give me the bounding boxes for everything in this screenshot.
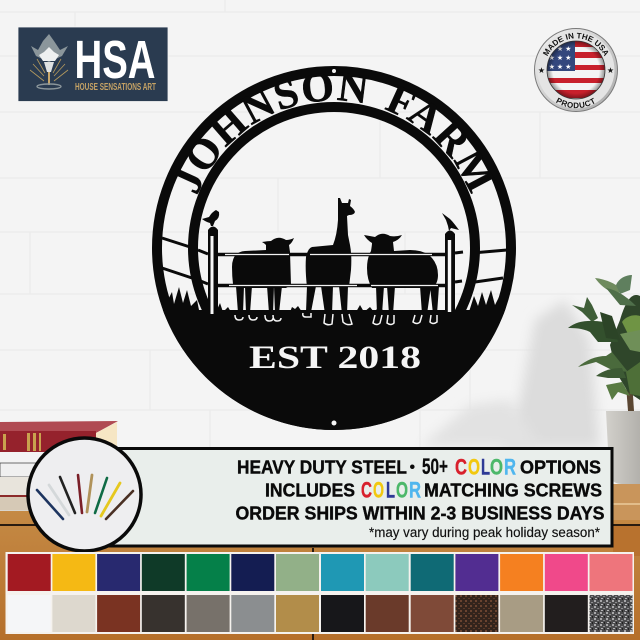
swatch row two [8, 595, 632, 632]
wood tabletop [0, 484, 640, 640]
llama legs [306, 286, 348, 314]
line two: MATCHING SCREWS [424, 480, 602, 500]
line two: O [396, 478, 408, 502]
ground and lower scene [162, 236, 506, 430]
llama [306, 198, 355, 314]
bird right [442, 213, 459, 231]
badge top text: MADE IN THE USA [542, 32, 608, 56]
badge bottom text: PRODUCT [556, 98, 594, 108]
line one: R [504, 454, 516, 480]
line one: O [490, 454, 503, 480]
badge: Made in the USA [534, 28, 618, 112]
note: *may vary during peak holiday season* [369, 525, 601, 540]
line one: O [468, 454, 480, 480]
line two: L [386, 478, 395, 502]
line two: INCLUDES [265, 480, 355, 500]
metal sign: Johnson Farm [152, 66, 516, 430]
established year: EST 2018 [249, 340, 421, 376]
inner ring [193, 107, 475, 389]
line one: HEAVY DUTY STEEL [237, 456, 407, 478]
info panel [105, 448, 612, 546]
line one: • [410, 459, 416, 476]
line two [265, 478, 602, 502]
right fence post [445, 230, 455, 312]
badge: Made in the USA: ★ [607, 66, 614, 75]
line two: O [373, 478, 384, 502]
bird left [202, 210, 219, 226]
sheep right legs [376, 286, 439, 314]
line three: ORDER SHIPS WITHIN 2-3 BUSINESS DAYS [236, 502, 604, 524]
logo letters HSA: HSA [74, 30, 156, 90]
line one: OPTIONS [520, 456, 601, 478]
stack of books [0, 421, 118, 511]
USA flag: ★ ★ ★ [549, 45, 571, 53]
logo tagline: HOUSE SENSATIONS ART [75, 81, 156, 93]
swatch row one [8, 554, 632, 591]
line one: C [455, 454, 467, 480]
logo torch icon [30, 34, 68, 89]
white rail highlights on animals [225, 254, 438, 286]
line two: R [409, 478, 421, 502]
plant pot [606, 411, 640, 484]
sheep left [232, 238, 294, 313]
screw photo circle [28, 438, 141, 551]
line one: 50+ [422, 454, 448, 479]
left fence post [208, 226, 218, 312]
line one [237, 454, 601, 480]
line one: L [481, 454, 490, 480]
USA flag: ★ ★ ★ [549, 63, 571, 71]
mounting holes [332, 69, 336, 426]
badge stars: ★ [538, 66, 545, 75]
grass along the ground [216, 303, 444, 316]
screws [37, 475, 133, 519]
outer ring [157, 71, 511, 425]
banner text: JOHNSON FARM [176, 76, 492, 194]
sheep right [364, 234, 439, 314]
USA flag [546, 40, 606, 100]
fence rails [216, 254, 447, 286]
line two: C [361, 478, 372, 502]
logo: HSA House Sensations Art [18, 27, 168, 102]
white hoof outlines [235, 313, 437, 325]
plant foliage [568, 275, 640, 411]
sheep left legs [236, 286, 282, 313]
USA flag: ★ ★ ★ [549, 54, 571, 62]
colour swatch panel [6, 552, 634, 634]
